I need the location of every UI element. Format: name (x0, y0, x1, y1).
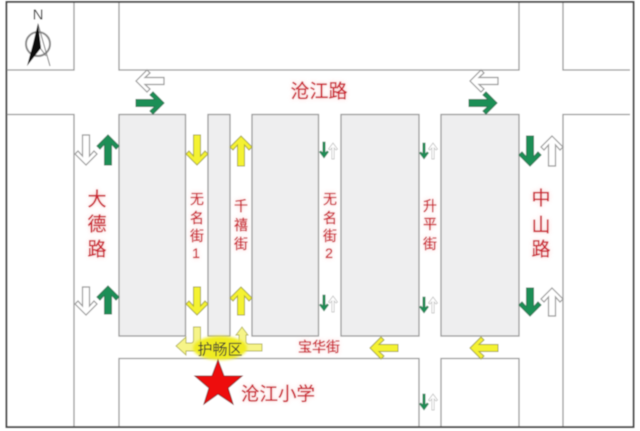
road label: Dade Road: 德 (87, 214, 107, 236)
road label: Shengping Street: 街 (423, 236, 437, 252)
road label: Zhongshan Road: 山 (531, 214, 551, 236)
road label: Zhongshan Road: 路 (531, 238, 551, 260)
road label: Qianxi Street: 禧 (234, 217, 248, 233)
road label: Wuming Street 2: 街 (323, 228, 337, 244)
road label: Baohua Street: 宝华街 (298, 339, 340, 355)
road label: Dade Road: 大 (87, 188, 107, 210)
road label: Wuming Street 1: 名 (190, 210, 204, 226)
school name: 沧江小学 (241, 384, 315, 404)
road label: Wuming Street 1: 1 (192, 245, 200, 261)
road label: Qianxi Street: 街 (234, 236, 248, 252)
road label: Wuming Street 2: 无 (323, 191, 337, 207)
road label: Qianxi Street (234, 198, 248, 252)
road label: Wuming Street 2: 2 (325, 245, 333, 261)
road label: Shengping Street (423, 198, 437, 252)
road label: Zhongshan Road (531, 188, 551, 260)
road label: Cangjiang Road: 沧江路 (290, 80, 348, 102)
road label: Shengping Street: 升 (423, 198, 437, 214)
arrows: small pairs (320, 142, 438, 410)
road label: Wuming Street 2: 名 (323, 210, 337, 226)
icon: school star (195, 360, 242, 404)
protected zone label: 护畅区 (197, 342, 243, 358)
arrows: Zhongshan Road (519, 136, 563, 316)
icon: north compass (26, 6, 50, 66)
icon: north compass: N (33, 6, 43, 24)
road label: Shengping Street: 平 (423, 216, 437, 232)
arrows: Dade Road (75, 135, 119, 315)
arrows: Baohua Street (370, 337, 498, 359)
road label: Wuming Street 1 (190, 191, 204, 261)
protected zone highlight (193, 336, 247, 360)
road label: Wuming Street 1: 无 (190, 191, 204, 207)
road label: Zhongshan Road: 中 (531, 188, 551, 210)
road label: Wuming Street 1: 街 (190, 228, 204, 244)
road label: Qianxi Street: 千 (234, 198, 248, 214)
road label: Wuming Street 2 (323, 191, 337, 261)
road label: Dade Road: 路 (87, 238, 107, 260)
arrows: Cangjiang Road (136, 70, 498, 114)
arrows: turning at school (176, 327, 262, 355)
road label: Dade Road (87, 188, 107, 260)
arrows: Wuming and Qianxi streets (186, 135, 252, 315)
